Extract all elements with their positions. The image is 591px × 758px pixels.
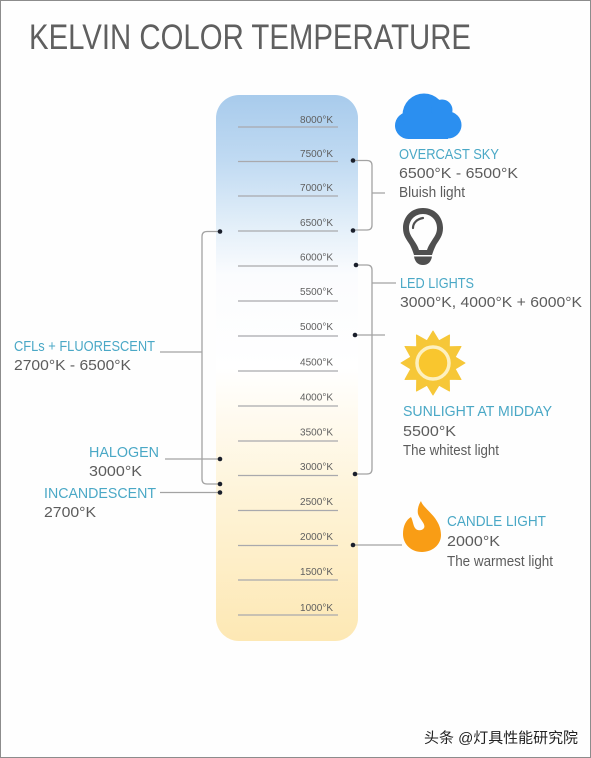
LED lights label — [400, 275, 582, 311]
LED lights label: 3000°K, 4000°K + 6000°K — [400, 294, 582, 311]
overcast sky label — [399, 146, 518, 201]
temperature scale bar: 1000°K — [300, 603, 333, 614]
connector: overcast sky bracket — [351, 158, 385, 233]
temperature scale bar: 7000°K — [300, 183, 333, 194]
temperature scale bar: 6000°K — [300, 252, 333, 264]
overcast sky label: Bluish light — [399, 184, 466, 201]
temperature scale bar — [216, 95, 358, 641]
icon: sun — [401, 331, 465, 395]
temperature scale bar: 8000°K — [300, 115, 333, 126]
watermark: 头条 @灯具性能研究院 — [424, 730, 579, 747]
temperature scale bar: 5000°K — [300, 322, 333, 333]
icon: light bulb — [403, 208, 443, 265]
CFLs and fluorescent label — [14, 338, 155, 374]
temperature scale bar: 3000°K — [300, 462, 333, 473]
candle light label: 2000°K — [447, 533, 500, 550]
temperature scale bar: 2000°K — [300, 532, 333, 543]
sunlight at midday label — [403, 403, 552, 459]
temperature scale bar: 5500°K — [300, 287, 333, 298]
sunlight at midday label: SUNLIGHT AT MIDDAY — [403, 403, 552, 420]
connector: candle light — [351, 543, 402, 547]
temperature scale bar: 6500°K — [300, 218, 333, 229]
icon: cloud — [395, 94, 462, 139]
title: KELVIN COLOR TEMPERATURE — [29, 18, 471, 57]
icon: candle flame — [403, 501, 441, 552]
candle light label: CANDLE LIGHT — [447, 513, 546, 530]
halogen label — [89, 444, 159, 480]
overcast sky label: OVERCAST SKY — [399, 146, 499, 163]
temperature scale bar: 4500°K — [300, 358, 333, 368]
connector: CFL and fluorescent bracket — [160, 229, 222, 486]
LED lights label: LED LIGHTS — [400, 275, 474, 292]
temperature scale bar: 4000°K — [300, 392, 333, 404]
overcast sky label: 6500°K - 6500°K — [399, 165, 518, 182]
incandescent label: 2700°K — [44, 504, 96, 521]
candle light label — [447, 513, 554, 570]
connector: LED lights bracket — [353, 263, 396, 476]
sunlight at midday label: The whitest light — [403, 442, 500, 459]
incandescent label: INCANDESCENT — [44, 485, 156, 502]
temperature scale bar: 3500°K — [300, 428, 333, 438]
CFLs and fluorescent label: 2700°K - 6500°K — [14, 357, 131, 374]
temperature scale bar: 7500°K — [300, 149, 333, 160]
connector: halogen — [165, 457, 222, 461]
temperature scale bar: 2500°K — [300, 497, 333, 508]
connector: incandescent — [160, 490, 222, 495]
halogen label: 3000°K — [89, 463, 142, 480]
CFLs and fluorescent label: CFLs + FLUORESCENT — [14, 338, 155, 355]
sunlight at midday label: 5500°K — [403, 423, 456, 440]
incandescent label — [44, 485, 156, 521]
halogen label: HALOGEN — [89, 444, 159, 461]
candle light label: The warmest light — [447, 553, 554, 570]
temperature scale bar: 1500°K — [300, 567, 333, 578]
